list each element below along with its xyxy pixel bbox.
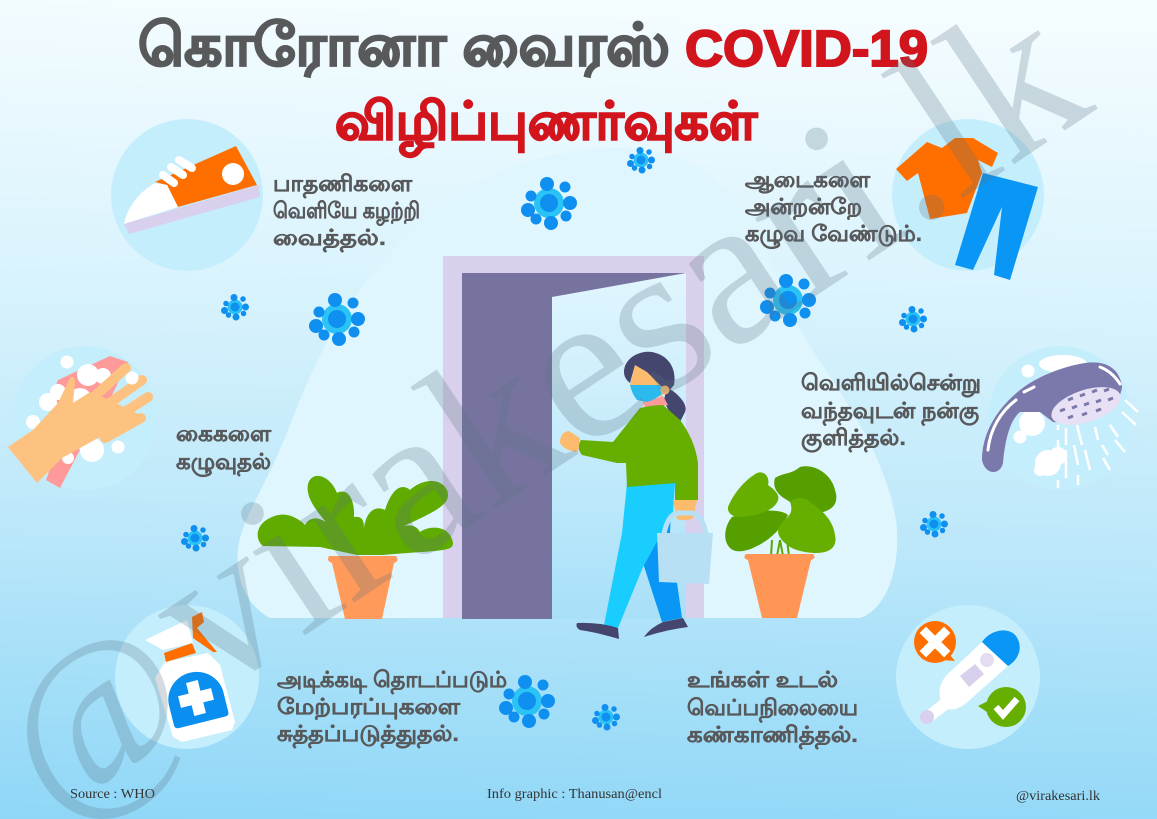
- person: [560, 352, 713, 639]
- hand back: [673, 500, 697, 520]
- hair: [624, 352, 675, 392]
- icon: thermometer: [896, 605, 1040, 749]
- text: temperature: [687, 667, 858, 750]
- text: footwear: பாதணிகளை: [273, 171, 413, 199]
- icon: shoe: [111, 119, 263, 271]
- viruses: [181, 147, 948, 730]
- pot: [328, 556, 398, 619]
- door: [443, 256, 704, 619]
- icon: clothes: [892, 119, 1044, 280]
- footer: handle: @virakesari.lk: [1016, 789, 1100, 804]
- badge: cross: [914, 621, 956, 663]
- ponytail: [664, 387, 686, 422]
- text: bathing: [801, 370, 981, 453]
- plant right: [725, 466, 836, 618]
- subtitle: விழிப்புணர்வுகள்: [335, 93, 758, 157]
- bag: [657, 513, 713, 584]
- pot: [744, 554, 815, 618]
- text: clothes: அன்றன்றே: [745, 194, 862, 219]
- badge: check: [978, 687, 1026, 727]
- text: bathing: வெளியில்சென்று: [801, 370, 981, 398]
- text: temperature: உங்கள் உடல்: [687, 667, 838, 692]
- text: footwear: [273, 171, 420, 253]
- background blob behind door: [237, 148, 897, 618]
- back leg: [627, 480, 682, 622]
- text: clothes: [745, 167, 922, 249]
- text: footwear: வெளியே கழற்றி: [273, 198, 420, 226]
- text: bathing: குளித்தல்.: [801, 425, 906, 453]
- sweater: [579, 405, 698, 502]
- text: clothes: ஆடைகளை: [745, 167, 871, 194]
- text: temperature: கண்காணித்தல்.: [687, 722, 858, 750]
- front leg: [604, 483, 675, 628]
- text: hand washing: [176, 421, 272, 477]
- text: clothes: கழுவ வேண்டும்.: [745, 221, 922, 249]
- text: hand washing: கழுவுதல்: [176, 449, 271, 477]
- text: surfaces: [277, 667, 507, 749]
- shoes: [576, 623, 619, 639]
- text: footwear: வைத்தல்.: [273, 225, 386, 253]
- title: [138, 13, 928, 78]
- title: கொரோனா வைரஸ்: [138, 13, 670, 78]
- text: surfaces: அடிக்கடி தொடப்படும்: [277, 667, 507, 695]
- icon: washing hands: [8, 346, 157, 490]
- text: hand washing: கைகளை: [176, 421, 272, 446]
- plant left: [258, 476, 453, 619]
- footer: source: Source : WHO: [70, 787, 155, 802]
- face: [630, 365, 664, 400]
- footer: credit: Info graphic : Thanusan@encl: [487, 787, 662, 802]
- mask: [630, 385, 663, 402]
- hand front: [560, 431, 580, 452]
- text: temperature: வெப்பநிலையை: [687, 695, 858, 723]
- text: surfaces: மேற்பரப்புகளை: [277, 694, 461, 719]
- text: surfaces: சுத்தப்படுத்துதல்.: [277, 721, 459, 749]
- title: COVID-19: [685, 20, 928, 77]
- neck: [643, 396, 668, 409]
- icon: spray bottle: [115, 605, 259, 749]
- icon: shower: [982, 346, 1138, 490]
- text: bathing: வந்தவுடன் நன்கு: [801, 398, 980, 426]
